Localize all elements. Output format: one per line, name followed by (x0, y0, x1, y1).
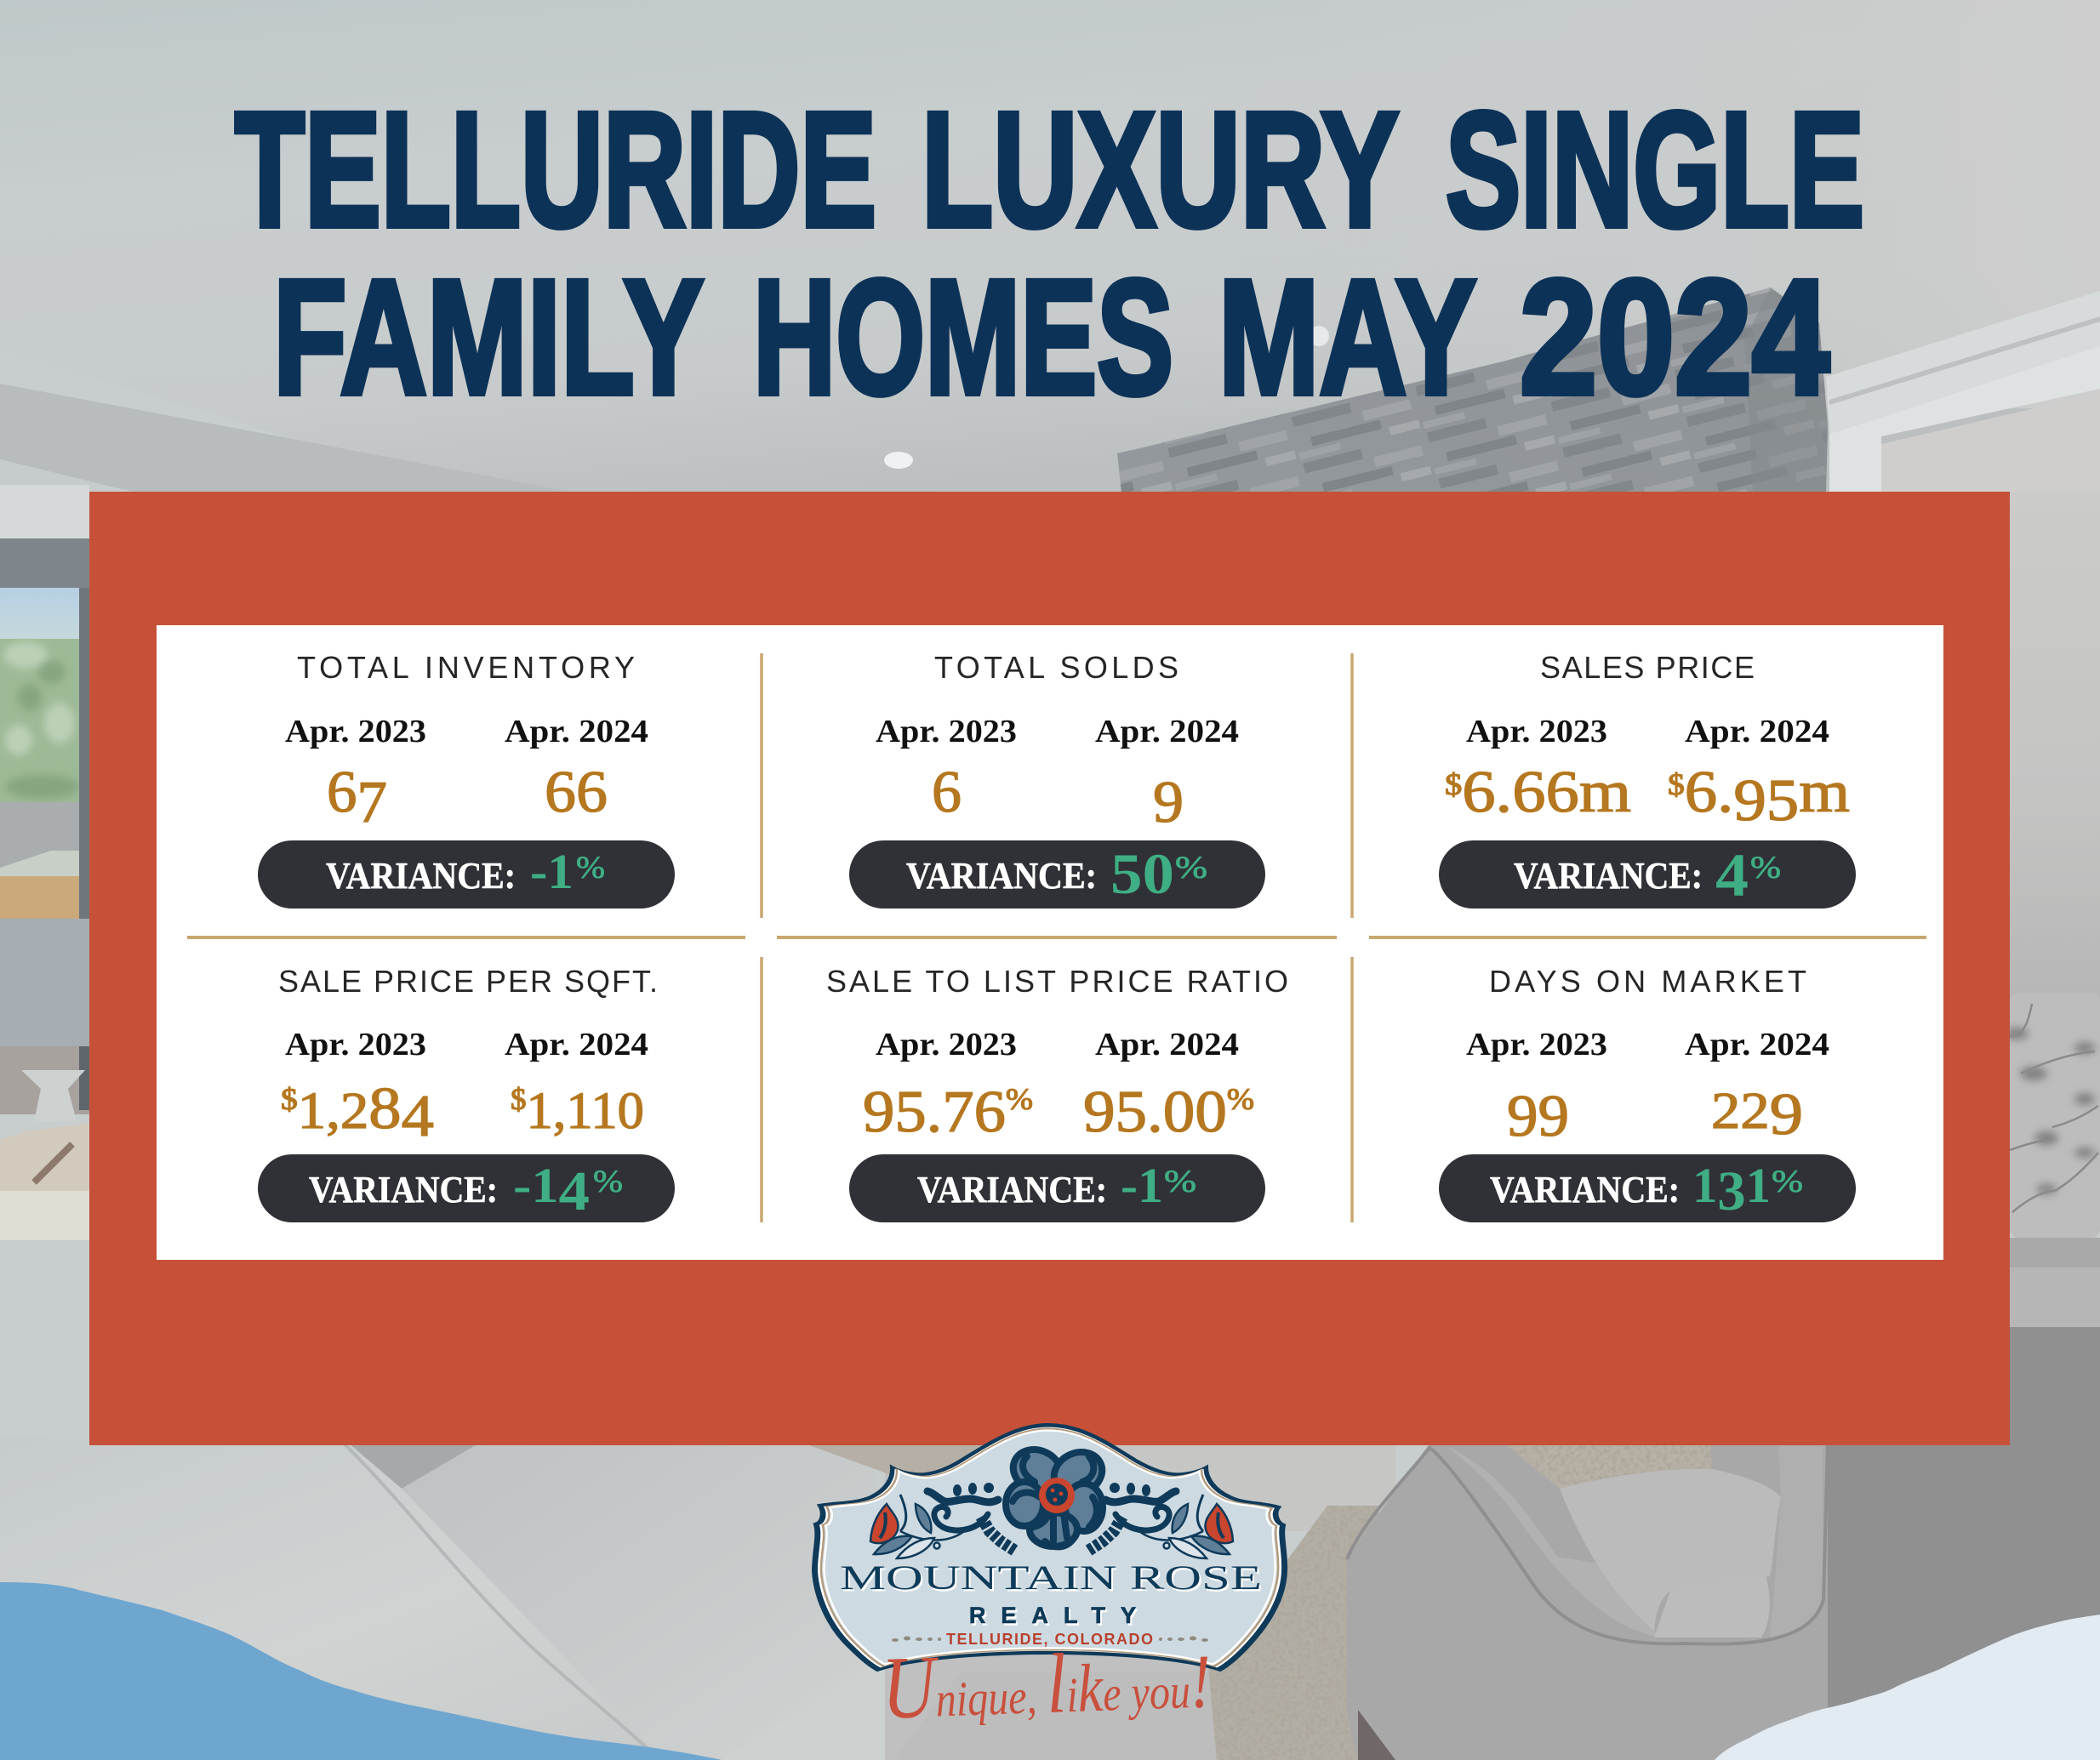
stat: total solds: TOTAL SOLDS (934, 650, 1178, 685)
wave: blue bottom left (0, 1582, 722, 1760)
pillows (0, 1123, 89, 1225)
table lamp shade (0, 919, 89, 1046)
stat: sales price: Apr. 2024 (1685, 714, 1829, 749)
stat: total solds: Apr. 2023 (876, 714, 1017, 749)
stat: sales price: $ (1445, 767, 1462, 801)
stat: total solds (849, 650, 1265, 908)
stat: sale to list price ratio: Apr. 2023 (876, 1027, 1017, 1062)
tagline: Unique, like you! (880, 1626, 1213, 1738)
lower cushion (722, 1663, 944, 1760)
stat: sale price per sqft: Apr. 2024 (505, 1027, 648, 1062)
stat: sale to list price ratio: % (1006, 1082, 1033, 1116)
title: MAY (1218, 245, 1476, 429)
rose flower (1006, 1442, 1109, 1546)
armchair inner arm (1447, 1446, 1659, 1638)
stat: total inventory: TOTAL INVENTORY (297, 650, 635, 685)
recessed ceiling light (884, 452, 913, 469)
stat: sale price per sqft: -1 (513, 1158, 554, 1213)
stat: sale price per sqft: $ (281, 1082, 298, 1116)
title: TELLURIDE (235, 78, 876, 260)
stat: days on market: Apr. 2023 (1466, 1027, 1607, 1062)
stat: total solds: % (1175, 851, 1207, 886)
stat: sales price: SALES PRICE (1540, 650, 1755, 685)
stat: days on market: Apr. 2024 (1685, 1027, 1829, 1062)
stat: days on market: 1 (1692, 1158, 1717, 1213)
stat: sale price per sqft: 4 (558, 1160, 590, 1222)
carpet behind seat (1502, 1442, 1712, 1489)
stat: sales price: 95 (1733, 768, 1799, 834)
wave: pale bottom right (1715, 1615, 2100, 1760)
cushion (402, 1438, 876, 1760)
stone chimney (1117, 288, 1828, 493)
logo: Mountain Rose Realty badge (813, 1425, 1286, 1738)
stat: sale to list price ratio: 95.76 (863, 1079, 997, 1145)
title: FAMILY (273, 245, 704, 429)
stat: sale to list price ratio: 95.00 (1083, 1079, 1217, 1145)
stat: sale price per sqft: Apr. 2023 (285, 1027, 426, 1062)
right wall (2010, 493, 2100, 1003)
stat: total inventory: 6 (327, 760, 357, 825)
stat: sales price: VARIANCE: (1514, 855, 1703, 897)
stat: sales price: 4 (1715, 841, 1749, 909)
stat: sales price: m (1799, 760, 1850, 825)
stat: days on market: VARIANCE: (1490, 1169, 1680, 1210)
stat: sale to list price ratio: -1 (1121, 1158, 1163, 1213)
stat: sale to list price ratio (826, 964, 1288, 1222)
stat: sale price per sqft: $ (511, 1082, 526, 1116)
title: HOMES (753, 245, 1173, 429)
glass lamp base (21, 1070, 85, 1121)
stat: total inventory: Apr. 2023 (285, 714, 426, 749)
right floral ornament (1088, 1483, 1233, 1558)
carpet (800, 1442, 1378, 1760)
stat: total inventory: VARIANCE: (326, 855, 516, 897)
stat: total solds: Apr. 2024 (1095, 714, 1239, 749)
brand name: MOUNTAIN ROSE (840, 1558, 1262, 1597)
stat: total inventory (258, 650, 675, 908)
right crown moulding (1826, 291, 2100, 434)
stat: sale price per sqft: 4 (402, 1084, 434, 1149)
chair seat band (2010, 1238, 2100, 1267)
stat: sale price per sqft: SALE PRICE PER SQFT. (278, 964, 658, 999)
armchair (1347, 1438, 1828, 1760)
stat: total inventory: -1 (530, 844, 574, 899)
armchair piping (1347, 1442, 1828, 1644)
stat: sales price: 6. (1685, 760, 1733, 825)
stat: sale to list price ratio: SALE TO LIST PRICE RATIO (826, 964, 1288, 999)
stat: sales price: % (1750, 851, 1781, 886)
stat: total solds: 9 (1153, 770, 1184, 835)
badge shield (813, 1425, 1286, 1670)
stat: sale to list price ratio: VARIANCE: (917, 1169, 1107, 1210)
panel: orange backing (89, 492, 2010, 1445)
location: TELLURIDE, COLORADO (946, 1631, 1153, 1648)
left sofa (0, 1191, 89, 1242)
stat: days on market: % (1772, 1165, 1803, 1199)
stat: total solds: 50 (1110, 841, 1174, 906)
stat: sales price: Apr. 2023 (1466, 714, 1607, 749)
stat: sale price per sqft: 1,110 (526, 1083, 644, 1140)
panel: white statistics card (157, 625, 1943, 1260)
stat: total solds: 6 (932, 760, 962, 825)
title: 2024 (1520, 245, 1829, 429)
stat: sales price (1439, 650, 1856, 909)
stat: sale to list price ratio: % (1164, 1165, 1196, 1199)
recessed ceiling light behind title (1309, 326, 1329, 346)
title (235, 78, 1864, 429)
stat: total inventory: 66 (545, 760, 608, 825)
stat: sale price per sqft: % (593, 1165, 623, 1199)
title: SINGLE (1446, 78, 1864, 260)
stat: days on market: DAYS ON MARKET (1489, 964, 1806, 999)
armchair seat (1560, 1469, 1781, 1631)
stat: sale price per sqft: VARIANCE: (309, 1169, 498, 1210)
stat: days on market: 9 (1770, 1082, 1803, 1148)
coffee table (1013, 1438, 1395, 1531)
stat: days on market (1439, 964, 1856, 1222)
title: LUXURY (922, 78, 1399, 260)
stat: days on market: 1 (1746, 1158, 1771, 1213)
stat: total solds: VARIANCE: (906, 855, 1097, 897)
stat: sale price per sqft: 1,2 (298, 1083, 368, 1140)
left crown moulding (0, 350, 571, 492)
stat: days on market: 99 (1507, 1084, 1569, 1149)
left window (0, 485, 89, 538)
stat: sale to list price ratio: % (1227, 1082, 1254, 1116)
stat: sale to list price ratio: Apr. 2024 (1095, 1027, 1239, 1062)
left floral ornament (870, 1483, 1015, 1558)
stat: total inventory: Apr. 2024 (505, 714, 648, 749)
stat: sale price per sqft: 8 (368, 1076, 398, 1142)
stat: total inventory: 7 (357, 770, 387, 835)
stat: sale price per sqft (258, 964, 675, 1222)
ceiling (0, 0, 2100, 510)
stat: total inventory: % (576, 851, 605, 886)
stat: days on market: 22 (1711, 1083, 1770, 1140)
realty: REALTY (969, 1603, 1136, 1628)
decorative dots (892, 1637, 1208, 1642)
stat: sales price: 6.66m (1462, 760, 1631, 825)
large grey chair back (1828, 1438, 2100, 1760)
tufted chair back (2010, 993, 2100, 1238)
stat: days on market: 3 (1717, 1160, 1746, 1222)
stat: sales price: $ (1668, 767, 1685, 801)
